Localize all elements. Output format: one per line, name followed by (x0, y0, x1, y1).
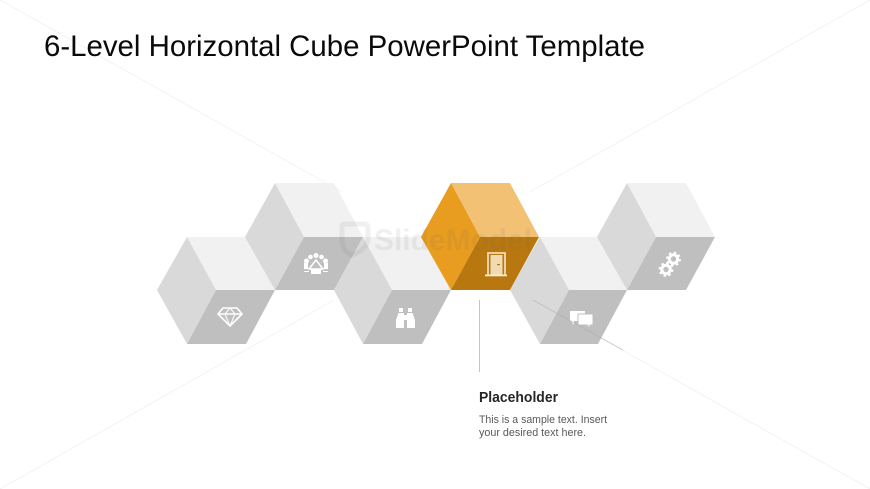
icon: binoculars (396, 308, 415, 328)
icon: diamond (218, 308, 242, 326)
cube 1: diamond (157, 237, 275, 344)
title: 6-Level Horizontal Cube PowerPoint Template (44, 30, 645, 63)
heading: Placeholder (479, 390, 558, 406)
body text: your desired text here. (479, 427, 586, 439)
connector line (478, 300, 480, 372)
cube 2: arch (245, 183, 363, 290)
watermark: SlideModel (374, 224, 532, 257)
text block: placeholder (479, 390, 610, 439)
icon: door (485, 253, 507, 276)
icon: arch of figures (304, 253, 328, 274)
cube 5: chat (510, 237, 627, 344)
icon: gears (660, 253, 680, 276)
cube 6: gears (597, 183, 715, 290)
icon: speech bubbles (570, 311, 593, 328)
cube 4: highlighted door (421, 183, 539, 290)
body text: This is a sample text. Insert (479, 414, 607, 426)
cube 3: binoculars (334, 237, 451, 344)
